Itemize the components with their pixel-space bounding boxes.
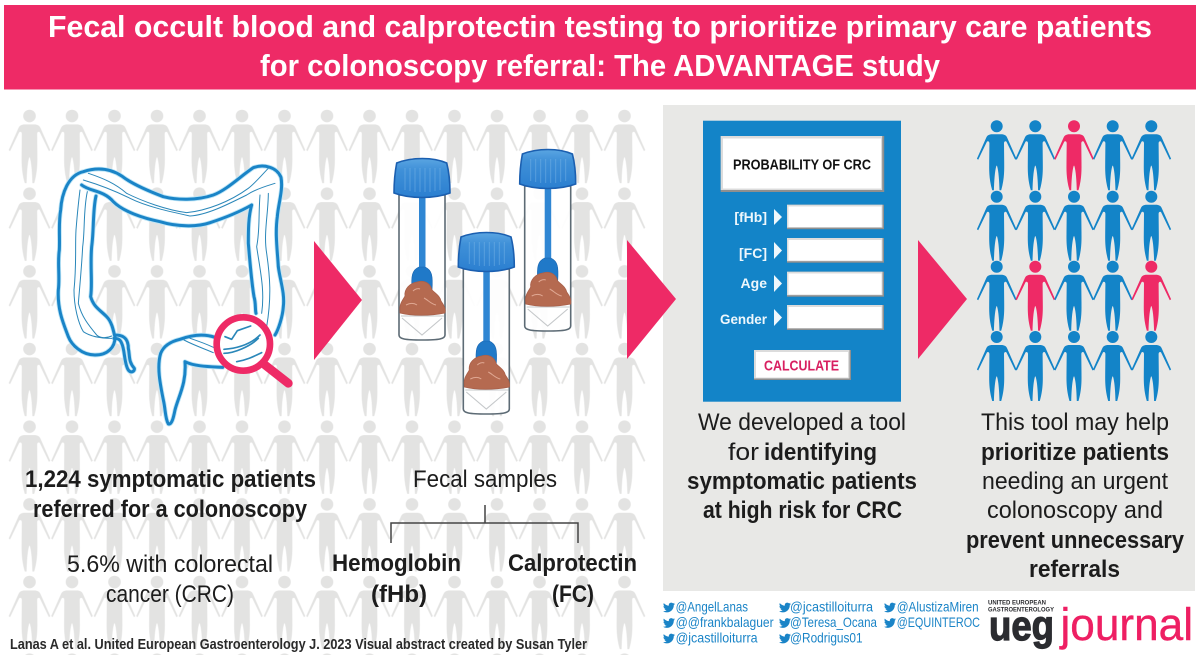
text block: fecal samples breakdown: Calprotectin xyxy=(508,550,637,577)
logo: ueg journal: ueg xyxy=(989,602,1054,649)
calculate button: CALCULATE xyxy=(764,358,839,374)
text block: study population: 1,224 symptomatic patients xyxy=(25,466,316,493)
text block: tool description: at high risk for CRC xyxy=(703,497,902,524)
text block: conclusion: prevent unnecessary xyxy=(966,527,1185,554)
title banner xyxy=(4,5,1196,90)
input row: fHb: [fHb] xyxy=(734,209,767,225)
arrow: patients to samples xyxy=(314,241,362,360)
text block: study population xyxy=(25,466,316,608)
twitter handles: @Teresa_Ocana xyxy=(790,614,877,630)
text block: conclusion: needing an urgent xyxy=(982,468,1168,495)
input row: Age xyxy=(741,272,884,297)
pictogram: blue and pink patients xyxy=(977,120,1171,401)
background: grey crowd of people xyxy=(8,108,646,655)
bracket connector xyxy=(391,505,578,543)
citation: Lanas A et al. United European Gastroenterology J. 2023 Visual abstract created by Susan Tyler xyxy=(10,637,587,653)
input row: fHb xyxy=(734,205,884,229)
text block: fecal samples breakdown: Fecal samples xyxy=(413,466,557,493)
logo: ueg journal: UNITED EUROPEAN xyxy=(988,599,1046,606)
text block: tool description xyxy=(687,409,917,524)
icon: colon with magnifying glass xyxy=(58,166,288,424)
icon: magnifying glass xyxy=(217,317,288,383)
text block: conclusion: colonoscopy and xyxy=(987,497,1163,524)
calculate button xyxy=(754,350,851,380)
text block: fecal samples breakdown: (fHb) xyxy=(371,581,427,608)
text block: tool description: identifying xyxy=(764,439,877,466)
logo: ueg journal: journal xyxy=(1059,599,1193,650)
twitter handles: @AlustizaMiren xyxy=(897,599,979,615)
input row: Gender: Gender xyxy=(720,311,768,327)
text block: conclusion: This tool may help xyxy=(981,409,1169,436)
twitter handles: @jcastilloiturra xyxy=(676,630,758,646)
text block: fecal samples breakdown: Hemoglobin xyxy=(332,550,461,577)
text block: tool description: symptomatic patients xyxy=(687,468,917,495)
icon: fecal sample tubes xyxy=(394,150,576,414)
panel: probability calculator xyxy=(703,121,901,402)
text block: study population: referred for a colonoscopy xyxy=(33,496,308,523)
twitter handles: @Rodrigus01 xyxy=(790,630,863,646)
text block: fecal samples breakdown: (FC) xyxy=(552,581,594,608)
input row: FC: [FC] xyxy=(739,245,767,261)
input row: FC xyxy=(739,238,884,263)
text block: study population: cancer (CRC) xyxy=(106,581,234,608)
input row: Gender xyxy=(720,305,884,330)
calculator heading button xyxy=(721,136,884,192)
text block: study population: 5.6% with colorectal xyxy=(67,551,273,578)
twitter handles xyxy=(663,599,980,646)
title text: Fecal occult blood and calprotectin testing to prioritize primary care patients xyxy=(48,9,1152,44)
arrow: samples to tool xyxy=(627,240,676,359)
input row: Age: Age xyxy=(741,275,767,291)
twitter handles: @jcastilloiturra xyxy=(790,599,873,615)
text block: conclusion: referrals xyxy=(1029,556,1120,583)
title text: for colonoscopy referral: The ADVANTAGE study xyxy=(260,48,941,83)
twitter handles: @AngelLanas xyxy=(676,599,748,615)
logo: ueg journal: GASTROENTEROLOGY xyxy=(988,607,1055,614)
panel: grey results background xyxy=(663,105,1195,591)
text block: tool description: We developed a tool xyxy=(698,409,906,436)
text block: tool description: for xyxy=(728,439,759,466)
text block: conclusion: prioritize patients xyxy=(981,439,1169,466)
arrow: tool to outcome xyxy=(918,240,967,359)
twitter handles: @@frankbalaguer xyxy=(676,614,774,630)
twitter handles: @EQUINTEROC xyxy=(897,614,980,630)
logo: ueg journal xyxy=(988,599,1193,650)
text block: conclusion xyxy=(966,409,1185,583)
title text xyxy=(48,9,1152,83)
calculator heading button: PROBABILITY OF CRC xyxy=(733,156,871,174)
text block: fecal samples breakdown xyxy=(332,466,637,608)
